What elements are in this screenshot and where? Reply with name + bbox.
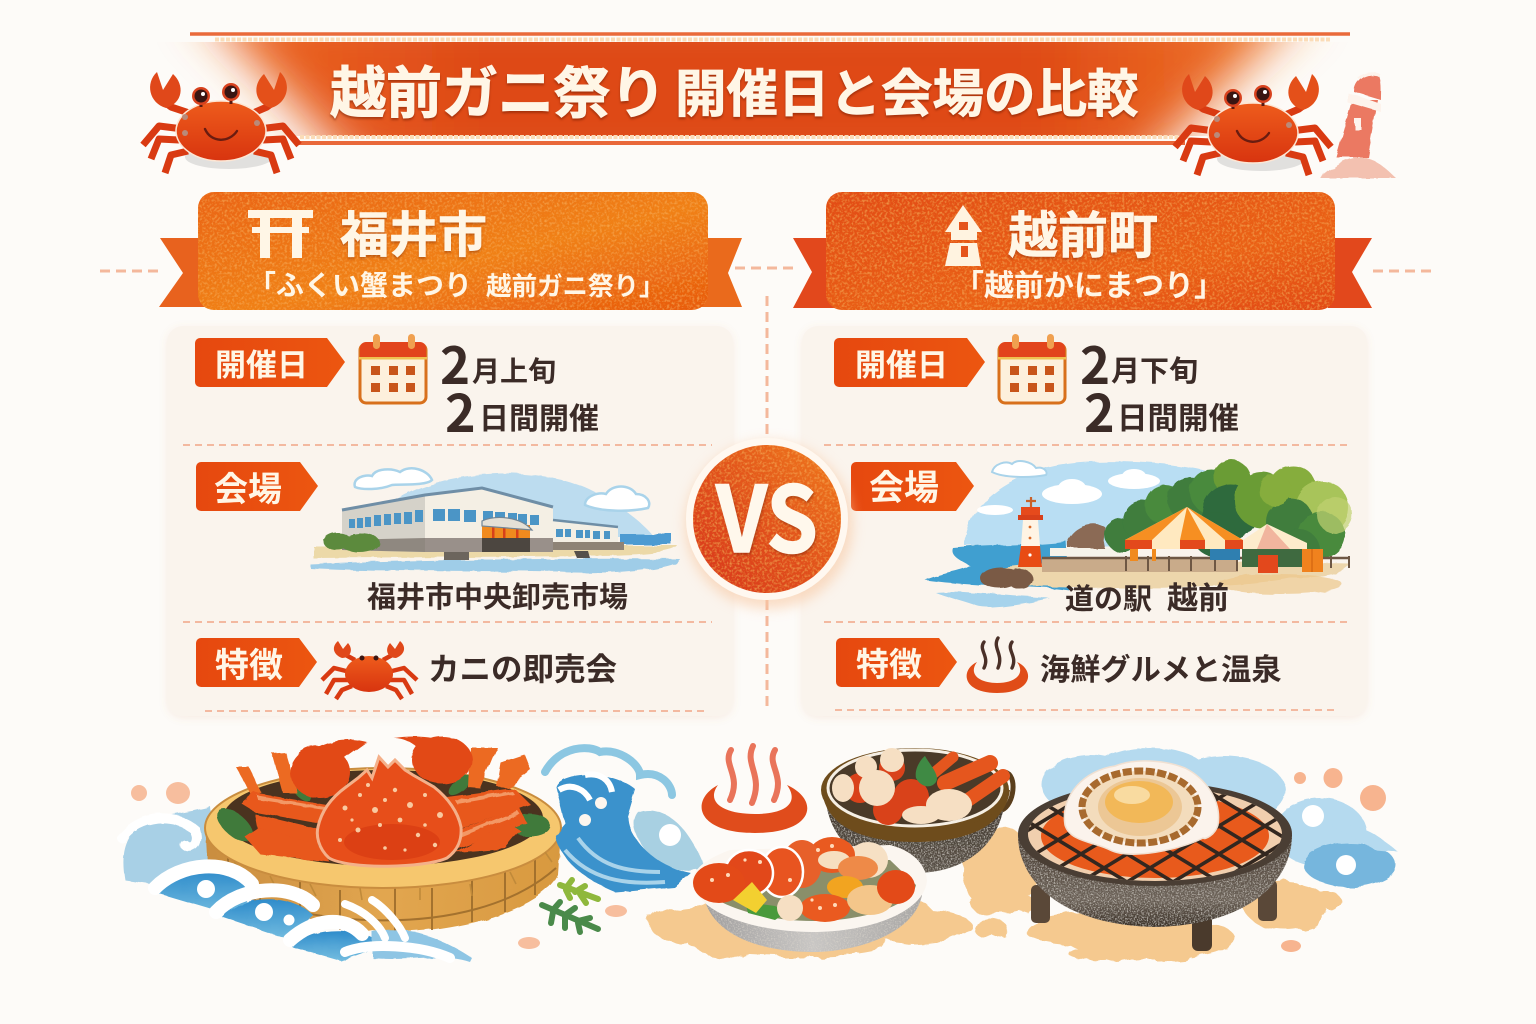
text: date early February: 日間開催 (479, 403, 599, 436)
subtitle: Fukui festival (248, 270, 665, 301)
scallop (1064, 761, 1219, 854)
heading: Fukui city: 福井市 (340, 209, 487, 263)
illustration: front waves left (155, 866, 472, 962)
heading: Echizen town: 越前町 (1008, 208, 1158, 264)
title text: 開催日と会場の比較 (675, 65, 1139, 123)
icon: torii gate (248, 210, 313, 258)
illustration: charcoal grill with scallop (1018, 761, 1292, 951)
icon: lighthouse (945, 205, 982, 266)
icon: hot spring symbol (702, 746, 807, 833)
badge: VS: VS (715, 447, 818, 579)
subtitle: Echizen festival: 「越前かにまつり」 (954, 270, 1224, 303)
tag: date: 開催日 (855, 348, 948, 383)
header ribbon: Echizen town (793, 192, 1372, 310)
label: station name: 道の駅 (1065, 583, 1152, 616)
tag: feature: 特徴 (215, 647, 283, 685)
crab legs and claws (211, 736, 550, 862)
text: date late February (1080, 325, 1239, 447)
tag: venue (196, 462, 318, 511)
tag: date (195, 338, 345, 387)
tag: venue: 会場 (869, 469, 939, 508)
text: date late February: 日間開催 (1117, 402, 1239, 436)
illustration: seafood bowl (692, 837, 927, 952)
label: station name (1065, 581, 1229, 616)
subtitle: Fukui festival: 越前ガニ祭り」 (486, 273, 665, 301)
icon: calendar (359, 334, 427, 403)
illustration: right big wave (545, 748, 705, 892)
tag: venue: 会場 (214, 471, 282, 509)
subtitle: Fukui festival: 「ふくい蟹まつり (248, 270, 472, 301)
badge: VS (685, 438, 853, 609)
food (693, 837, 915, 922)
tag: date (834, 338, 985, 387)
text: date early February: 月上旬 (472, 356, 556, 387)
background: left decorative dots (131, 782, 627, 949)
crab shell (317, 757, 461, 866)
icon: right crab mascot (1175, 74, 1331, 175)
text: date late February: 2 (1084, 372, 1115, 447)
icon: lighthouse on mound (1320, 73, 1396, 178)
label: station name: 越前 (1167, 581, 1229, 616)
text: date early February: 2 (440, 325, 470, 399)
icon: calendar (998, 334, 1066, 403)
header ribbon: Fukui city (159, 192, 742, 310)
illustration: wholesale market (310, 468, 680, 614)
text: date early February (440, 325, 599, 447)
label: market name: 福井市中央卸売市場 (367, 581, 628, 614)
illustration: crab basket (205, 736, 561, 932)
tag: feature: 特徴 (856, 646, 922, 683)
text: date late February: 月下旬 (1111, 355, 1198, 388)
tag: date: 開催日 (215, 348, 308, 383)
illustration: blue clouds behind grill (1042, 748, 1398, 887)
icon: left crab mascot (143, 72, 299, 173)
title banner (182, 32, 1350, 145)
text: date early February: 2 (445, 372, 476, 447)
side dashes and centre line (100, 268, 1436, 708)
illustration: seafood pot (821, 748, 1013, 873)
title text: 越前ガニ祭り (330, 62, 666, 125)
illustration: roadside station Echizen (925, 460, 1353, 616)
panel: Echizen details (802, 325, 1367, 716)
panel: Fukui details (167, 325, 733, 716)
tag: feature (836, 638, 957, 687)
text: crab sale: カニの即売会 (428, 651, 617, 687)
text: seafood and hot springs: 海鮮グルメと温泉 (1040, 653, 1282, 687)
illustration: leaves (542, 880, 598, 932)
tag: venue (851, 462, 974, 511)
illustration: back waves left (122, 806, 215, 885)
decor: grill dots (1281, 768, 1386, 952)
background: sand splashes (650, 828, 1340, 963)
text: date late February: 2 (1080, 325, 1110, 399)
icon: hot spring (967, 638, 1028, 693)
icon: small crab (322, 641, 417, 699)
tag: feature (196, 638, 317, 687)
title text (330, 62, 1139, 125)
